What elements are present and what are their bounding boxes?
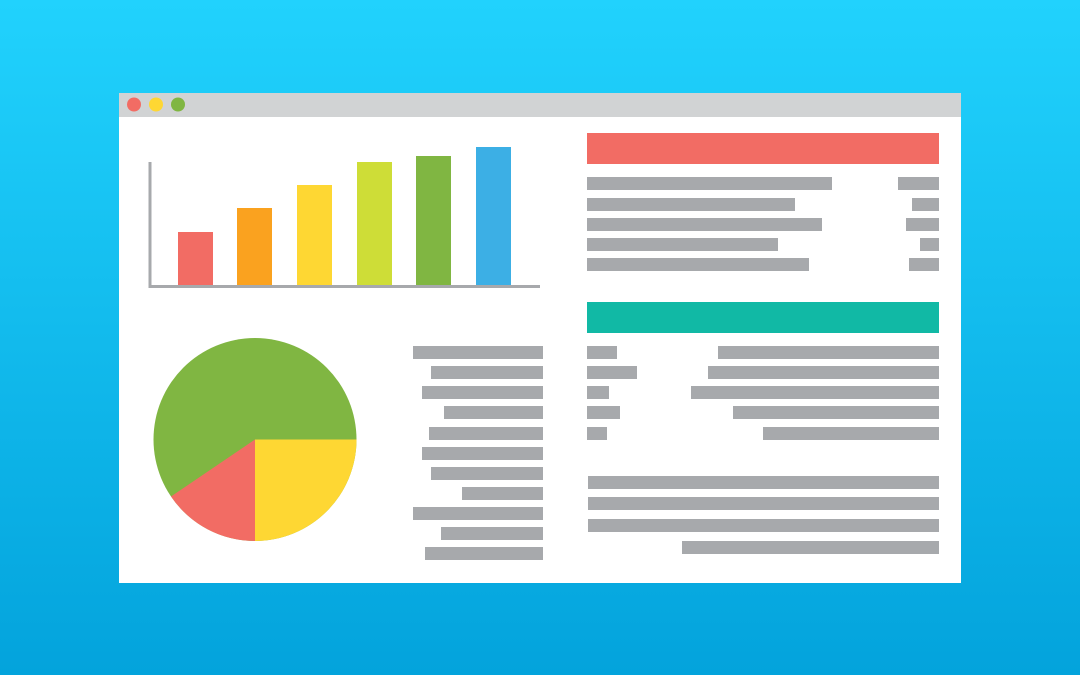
bar chart [150,147,540,286]
window control buttons [127,98,185,112]
red table rows [587,177,939,271]
pie chart [154,338,356,541]
red table header [587,133,939,164]
teal table header [587,302,939,333]
teal table rows [587,346,939,440]
browser title bar [119,93,961,117]
chart axes [150,162,540,286]
paragraph text lines [588,476,939,554]
pie chart legend text lines [413,346,543,560]
panel: browser window [119,93,961,583]
